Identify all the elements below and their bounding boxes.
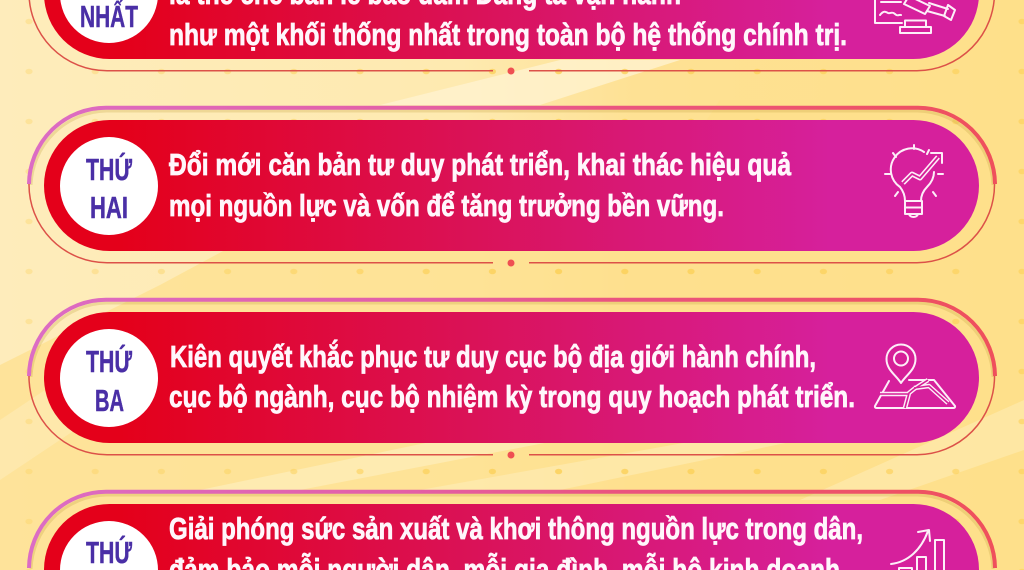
text: thứ nhất line 2: như một khối thống nhất trong toàn bộ hệ thống chính trị. <box>169 18 847 52</box>
red to magenta pill <box>44 504 979 570</box>
text: thứ tư line 1: Giải phóng sức sản xuất và khơi thông nguồn lực trong dân, <box>169 512 863 546</box>
text: thứ ba line 2: cục bộ ngành, cục bộ nhiệm kỳ trong quy hoạch phát triển. <box>169 380 855 414</box>
icon: rising bar chart <box>891 530 944 570</box>
text: thứ hai line 1: Đổi mới căn bản tư duy phát triển, khai thác hiệu quả <box>169 148 792 182</box>
panel: thứ ba <box>29 300 995 458</box>
badge circle <box>60 0 158 43</box>
text: thứ ba line 1: Kiên quyết khắc phục tư duy cục bộ địa giới hành chính, <box>170 338 816 374</box>
badge circle <box>60 137 158 235</box>
panel: thứ nhất <box>29 0 995 75</box>
outline frame <box>29 300 995 458</box>
red to magenta pill <box>44 0 979 59</box>
outline frame <box>29 492 995 569</box>
badge label: thứ ba: BA <box>95 383 124 418</box>
badge label: thứ: THỨ <box>86 534 132 570</box>
text: thứ hai line 2: mọi nguồn lực và vốn để tăng trưởng bền vững. <box>169 189 724 223</box>
badge label: thứ ba: THỨ <box>86 343 132 379</box>
outline frame <box>29 108 995 267</box>
outline frame <box>29 0 995 75</box>
badge circle <box>60 329 158 427</box>
panel: thứ hai <box>29 108 995 267</box>
badge circle <box>60 521 158 570</box>
red to magenta pill <box>44 312 979 443</box>
panel: thứ tư <box>29 492 995 570</box>
badge label: thứ hai: THỨ <box>86 151 132 187</box>
badge label: thứ hai: HAI <box>90 190 128 225</box>
icon: light bulb with growth arrow <box>885 145 943 217</box>
icon: map with location pin <box>875 344 955 408</box>
badge label: nhất: NHẤT <box>80 0 138 34</box>
icon: gavel and document <box>875 0 955 33</box>
badge label: thứ hai <box>86 151 132 225</box>
red to magenta pill <box>44 120 979 251</box>
badge label: thứ ba <box>86 343 132 418</box>
